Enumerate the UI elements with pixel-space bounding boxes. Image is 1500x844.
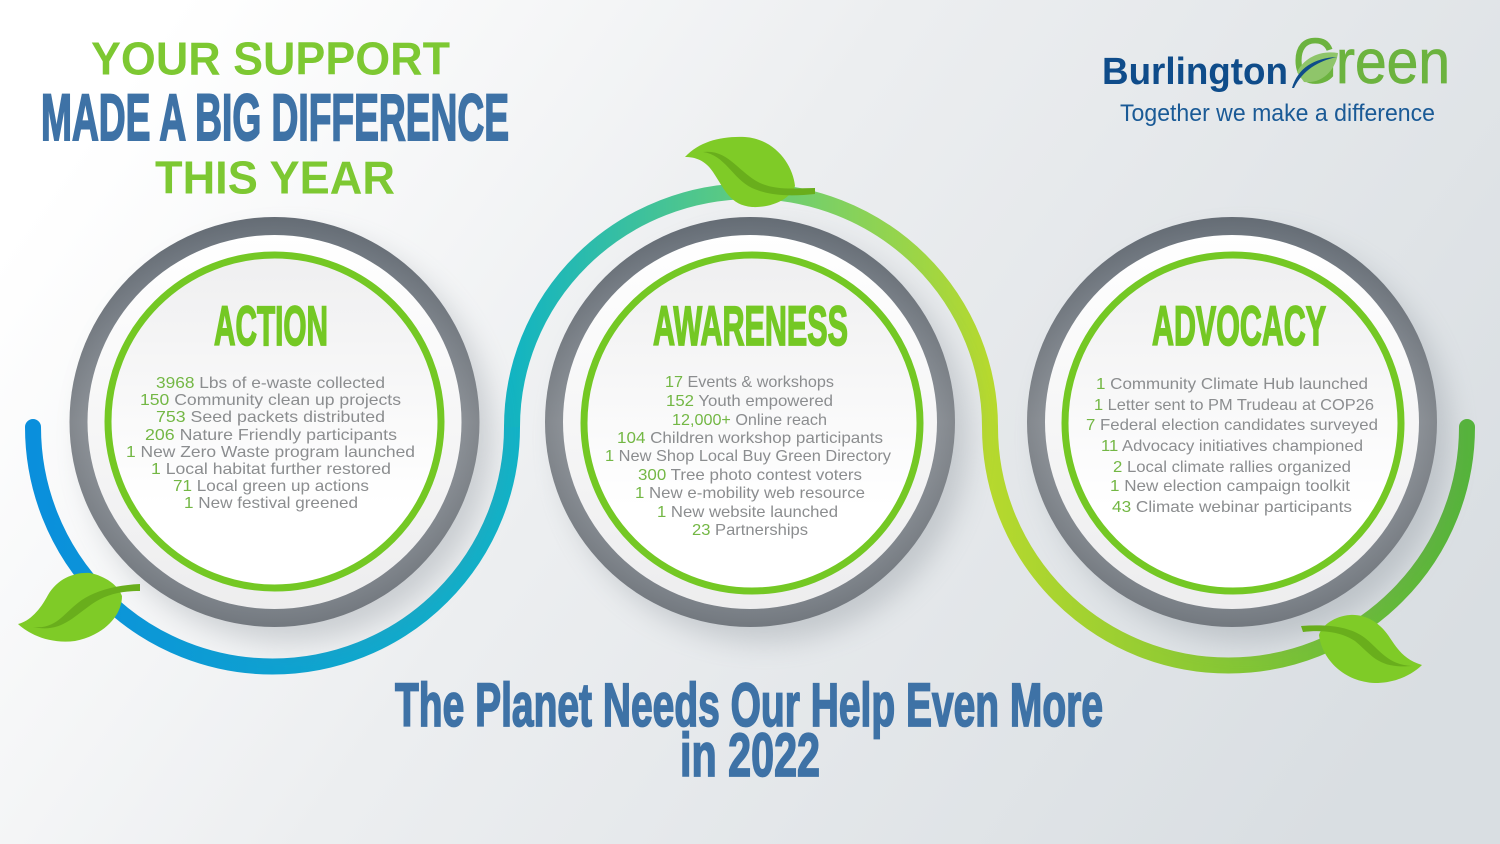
text block: action stats	[126, 375, 415, 512]
icon: logo leaf	[1292, 52, 1338, 88]
text block: advocacy stats: 1 Community Climate Hub launched	[1096, 376, 1368, 393]
text block: advocacy stats: 7 Federal election candidates surveyed	[1086, 417, 1378, 434]
text block: awareness stats: 23 Partnerships	[692, 522, 808, 539]
title: THIS YEAR	[155, 152, 395, 204]
text block: action stats: 753 Seed packets distributed	[156, 409, 385, 426]
text block: action stats: 3968 Lbs of e-waste collected	[156, 375, 385, 392]
title: MADE A BIG DIFFERENCE	[41, 80, 509, 154]
panel: advocacy	[1027, 217, 1450, 642]
text block: awareness stats: 104 Children workshop participants	[617, 430, 883, 447]
text block: awareness stats: 1 New Shop Local Buy Green Directory	[605, 448, 891, 465]
text block: awareness stats: 1 New e-mobility web resource	[635, 485, 865, 502]
text block: awareness stats: 1 New website launched	[657, 504, 838, 521]
logo: BurlingtonGreen: G	[1293, 25, 1337, 97]
logo: BurlingtonGreen: reen	[1336, 28, 1450, 97]
icon: top leaf	[685, 137, 815, 207]
ribbon: flowing gradient line	[33, 191, 1467, 666]
closing message: The Planet Needs Our Help Even More	[395, 671, 1103, 739]
logo: BurlingtonGreen	[1102, 25, 1450, 127]
text block: advocacy stats: 1 New election campaign toolkit	[1110, 478, 1351, 495]
closing message	[395, 671, 1103, 789]
text block: action stats: 1 New festival greened	[184, 495, 358, 512]
heading: awareness: AWARENESS	[653, 294, 848, 357]
text block: action stats: 206 Nature Friendly participants	[145, 427, 397, 444]
text block: action stats: 1 New Zero Waste program launched	[126, 444, 415, 461]
title: YOUR SUPPORT	[91, 32, 450, 84]
text block: action stats: 150 Community clean up projects	[140, 392, 401, 409]
text block: action stats: 71 Local green up actions	[173, 478, 369, 495]
text block: awareness stats: 152 Youth empowered	[666, 393, 833, 410]
text block: awareness stats: 300 Tree photo contest voters	[638, 467, 862, 484]
panel: action	[70, 217, 492, 642]
heading: advocacy: ADVOCACY	[1152, 294, 1326, 357]
text block: advocacy stats	[1086, 376, 1378, 516]
heading: action: ACTION	[214, 294, 328, 357]
text block: awareness stats: 17 Events & workshops	[665, 374, 834, 391]
text block: advocacy stats: 11 Advocacy initiatives championed	[1101, 438, 1363, 455]
text block: advocacy stats: 2 Local climate rallies organized	[1113, 459, 1351, 476]
text block: advocacy stats: 43 Climate webinar participants	[1112, 499, 1352, 516]
text block: awareness stats	[605, 374, 891, 539]
text block: awareness stats: 12,000+ Online reach	[672, 412, 827, 429]
panel: awareness	[545, 217, 968, 642]
closing message: in 2022	[680, 721, 820, 789]
text block: action stats: 1 Local habitat further restored	[151, 461, 391, 478]
text block: advocacy stats: 1 Letter sent to PM Trudeau at COP26	[1094, 397, 1374, 414]
logo: BurlingtonGreen: Together we make a difference	[1120, 100, 1435, 127]
logo: BurlingtonGreen: Burlington	[1102, 51, 1288, 93]
icon: bottom-left leaf	[18, 573, 140, 642]
icon: bottom-right leaf	[1301, 615, 1422, 683]
title	[41, 32, 509, 204]
